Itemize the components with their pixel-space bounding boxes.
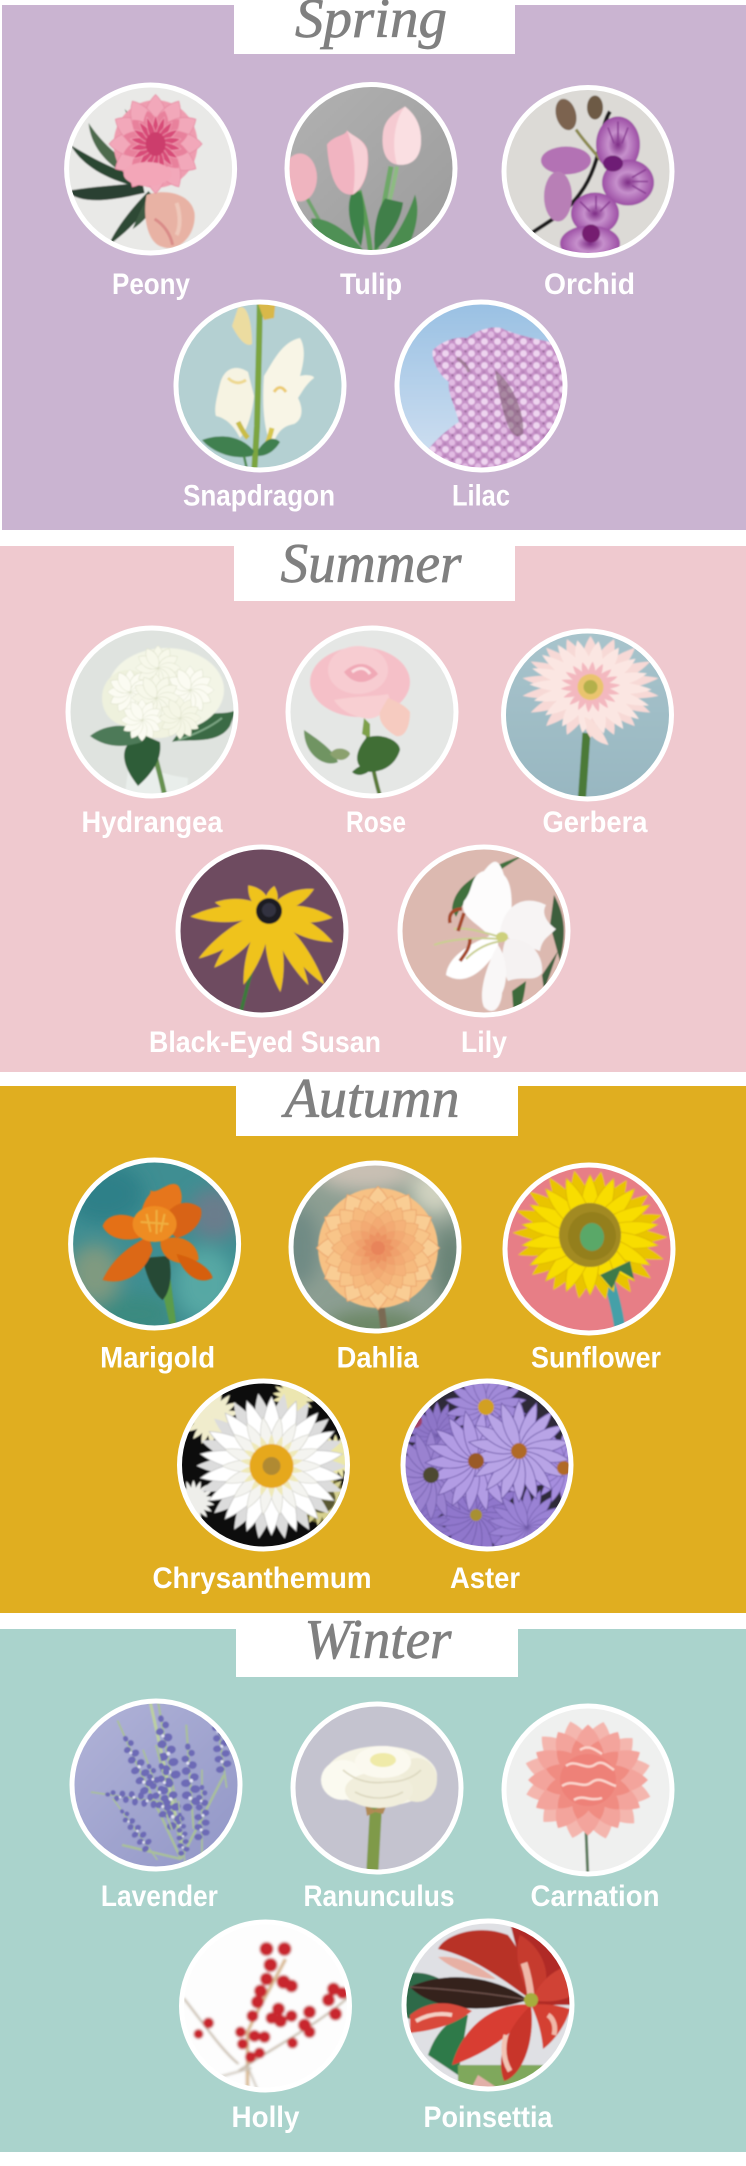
icon: carnation photo [498, 1700, 678, 1880]
icon: sunflower photo [499, 1158, 679, 1339]
icon: gerbera photo [498, 625, 678, 805]
icon: lilac photo [391, 296, 571, 476]
icon: aster photo [400, 1378, 574, 1552]
icon: dahlia photo [288, 1160, 462, 1334]
icon: snapdragon photo [170, 296, 350, 476]
icon: black-eyed susan photo [172, 841, 352, 1021]
flower: aster [400, 1378, 574, 1588]
heading: Autumn: Autumn [280, 1068, 460, 1130]
panel: winter [0, 1609, 746, 2152]
panel: summer [0, 533, 746, 1072]
panel: spring [2, 0, 746, 530]
label: Chrysanthemum: Chrysanthemum [152, 1562, 372, 1595]
icon: holly photo [176, 1916, 356, 2096]
flower: lilac [391, 296, 571, 512]
flower: lily [394, 841, 574, 1059]
heading: Summer [234, 533, 515, 601]
icon: poinsettia photo [398, 1915, 578, 2095]
label: Lavender: Lavender [101, 1880, 218, 1913]
icon: rose photo [282, 622, 462, 802]
icon: peony photo [61, 79, 241, 259]
winter background [0, 1629, 746, 2152]
heading: Winter: Winter [304, 1609, 452, 1671]
heading: Summer: Summer [280, 533, 462, 595]
summer background [0, 546, 746, 1072]
icon: lavender photo [66, 1694, 246, 1875]
flower: snapdragon [170, 296, 350, 512]
icon: chrysanthemum photo [177, 1378, 350, 1552]
flower: marigold [65, 1154, 245, 1374]
heading: Spring [234, 0, 515, 54]
heading: Autumn [236, 1068, 518, 1136]
label: Hydrangea: Hydrangea [82, 806, 223, 839]
icon: tulip photo [281, 78, 461, 258]
flower: black-eyed susan [149, 841, 381, 1059]
label: Poinsettia: Poinsettia [424, 2101, 553, 2134]
label: Lilac: Lilac [452, 480, 510, 512]
flower: carnation [498, 1700, 678, 1913]
flower: holly [176, 1916, 356, 2134]
label: Dahlia: Dahlia [337, 1342, 419, 1374]
panel: autumn [0, 1068, 746, 1613]
flower: orchid [498, 82, 678, 301]
label: Aster: Aster [450, 1562, 520, 1595]
label: Tulip: Tulip [340, 268, 402, 301]
icon: hydrangea photo [62, 622, 242, 802]
label: Holly: Holly [232, 2101, 300, 2134]
label: Marigold: Marigold [100, 1342, 215, 1374]
label: Lily: Lily [461, 1026, 507, 1059]
flower: ranunculus [287, 1698, 467, 1913]
label: Peony: Peony [112, 268, 190, 301]
flower: tulip [281, 78, 461, 301]
label: Snapdragon: Snapdragon [183, 480, 335, 512]
icon: lily photo [394, 841, 574, 1021]
label: Sunflower: Sunflower [531, 1342, 661, 1374]
label: Black-Eyed Susan: Black-Eyed Susan [149, 1026, 381, 1059]
flower: peony [61, 79, 241, 301]
flower: chrysanthemum [152, 1375, 372, 1595]
flower: lavender [66, 1694, 246, 1913]
flower: hydrangea [62, 622, 242, 839]
autumn background [0, 1086, 746, 1613]
icon: ranunculus photo [287, 1698, 467, 1878]
label: Rose: Rose [346, 806, 406, 839]
icon: orchid photo [498, 82, 678, 262]
flower: sunflower [499, 1158, 679, 1374]
label: Carnation: Carnation [530, 1880, 660, 1913]
label: Orchid: Orchid [544, 268, 635, 301]
heading: Winter [236, 1609, 518, 1677]
flower: gerbera [498, 625, 678, 839]
label: Gerbera: Gerbera [542, 806, 648, 839]
label: Ranunculus: Ranunculus [304, 1880, 454, 1913]
flower: poinsettia [398, 1915, 578, 2134]
flower: dahlia [288, 1160, 462, 1368]
spring background [2, 5, 746, 530]
icon: marigold photo [65, 1154, 245, 1334]
flower: rose [282, 622, 462, 839]
